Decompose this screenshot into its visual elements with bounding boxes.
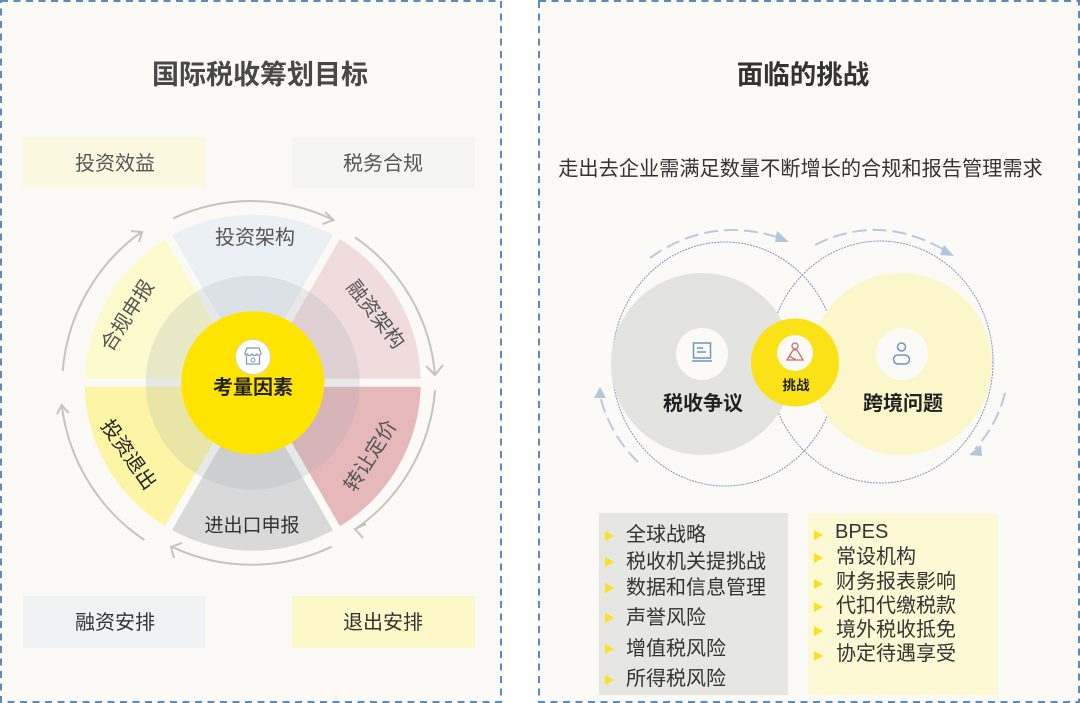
sector: transfer pricing: [253, 383, 421, 528]
goal box: investment return: [23, 137, 205, 188]
goal box: financing arrangement: [23, 596, 205, 648]
list: right issues: 财务报表影响: [836, 570, 956, 593]
label: financing structure: 融资架构: [342, 276, 409, 353]
center label: 考量因素: [213, 376, 293, 399]
label: compliance filing: 合规申报: [96, 276, 159, 356]
goal box: tax compliance: 税务合规: [343, 152, 423, 175]
heading: tax planning goals: 国际税收筹划目标: [152, 60, 368, 90]
goal box: tax compliance: [292, 137, 475, 188]
list: left risks: 所得税风险: [626, 667, 726, 690]
cycle arrows: [57, 201, 443, 565]
list: right issues: 协定待遇享受: [836, 642, 956, 665]
goal box: exit arrangement: [292, 596, 475, 648]
list: left risks: [599, 513, 788, 695]
list: left risks: 声誉风险: [626, 606, 706, 629]
icon: person: [894, 343, 910, 364]
circle: cross-border issues: 跨境问题: [863, 391, 943, 415]
sector: financing structure: [253, 237, 421, 383]
label: investment structure: 投资架构: [215, 226, 295, 249]
list: right issues: 代扣代缴税款: [836, 594, 956, 617]
goal box: financing arrangement: 融资安排: [75, 611, 155, 634]
list: left risks: 增值税风险: [626, 637, 726, 660]
panel: tax planning goals: [1, 1, 501, 702]
list: left risks: 数据和信息管理: [626, 576, 766, 599]
dashed arrows: [600, 230, 1005, 462]
list: right issues: [808, 514, 998, 695]
label: investment exit: 投资退出: [96, 415, 161, 494]
circle: challenge: 挑战: [782, 378, 810, 393]
goal box: investment return: 投资效益: [75, 152, 155, 175]
goal box: exit arrangement: 退出安排: [343, 611, 423, 634]
list: right issues: BPES: [835, 521, 888, 543]
list: right issues: 境外税收抵免: [836, 618, 956, 641]
sector: investment exit: [85, 383, 253, 528]
center circle: [181, 311, 324, 454]
icon: shop: [236, 340, 270, 374]
sector: investment structure: [169, 215, 337, 383]
dotted outline circles: [612, 241, 993, 486]
sector: compliance filing: [85, 237, 253, 383]
list: left risks: 税收机关提挑战: [626, 550, 766, 573]
icon: monitor: [692, 343, 712, 361]
subtitle: 走出去企业需满足数量不断增长的合规和报告管理需求: [558, 158, 1043, 180]
label: import export declaration: 进出口申报: [204, 514, 300, 536]
heading: challenges: 面临的挑战: [737, 60, 870, 90]
circle: tax disputes: [611, 273, 793, 455]
label: transfer pricing: 转让定价: [340, 416, 402, 496]
wheel: considerations: [75, 215, 430, 551]
icon: seated figure: [787, 343, 803, 360]
sector: import export declaration: [169, 383, 337, 551]
venn diagram: [594, 230, 1005, 486]
panel: challenges: [539, 1, 1079, 702]
middle ring: [146, 276, 360, 490]
list: left risks: 全球战略: [626, 523, 706, 546]
circle: tax disputes: 税收争议: [663, 392, 743, 415]
circle: cross-border issues: [810, 273, 992, 455]
circle: challenge: [751, 318, 839, 406]
list: right issues: 常设机构: [836, 545, 916, 568]
